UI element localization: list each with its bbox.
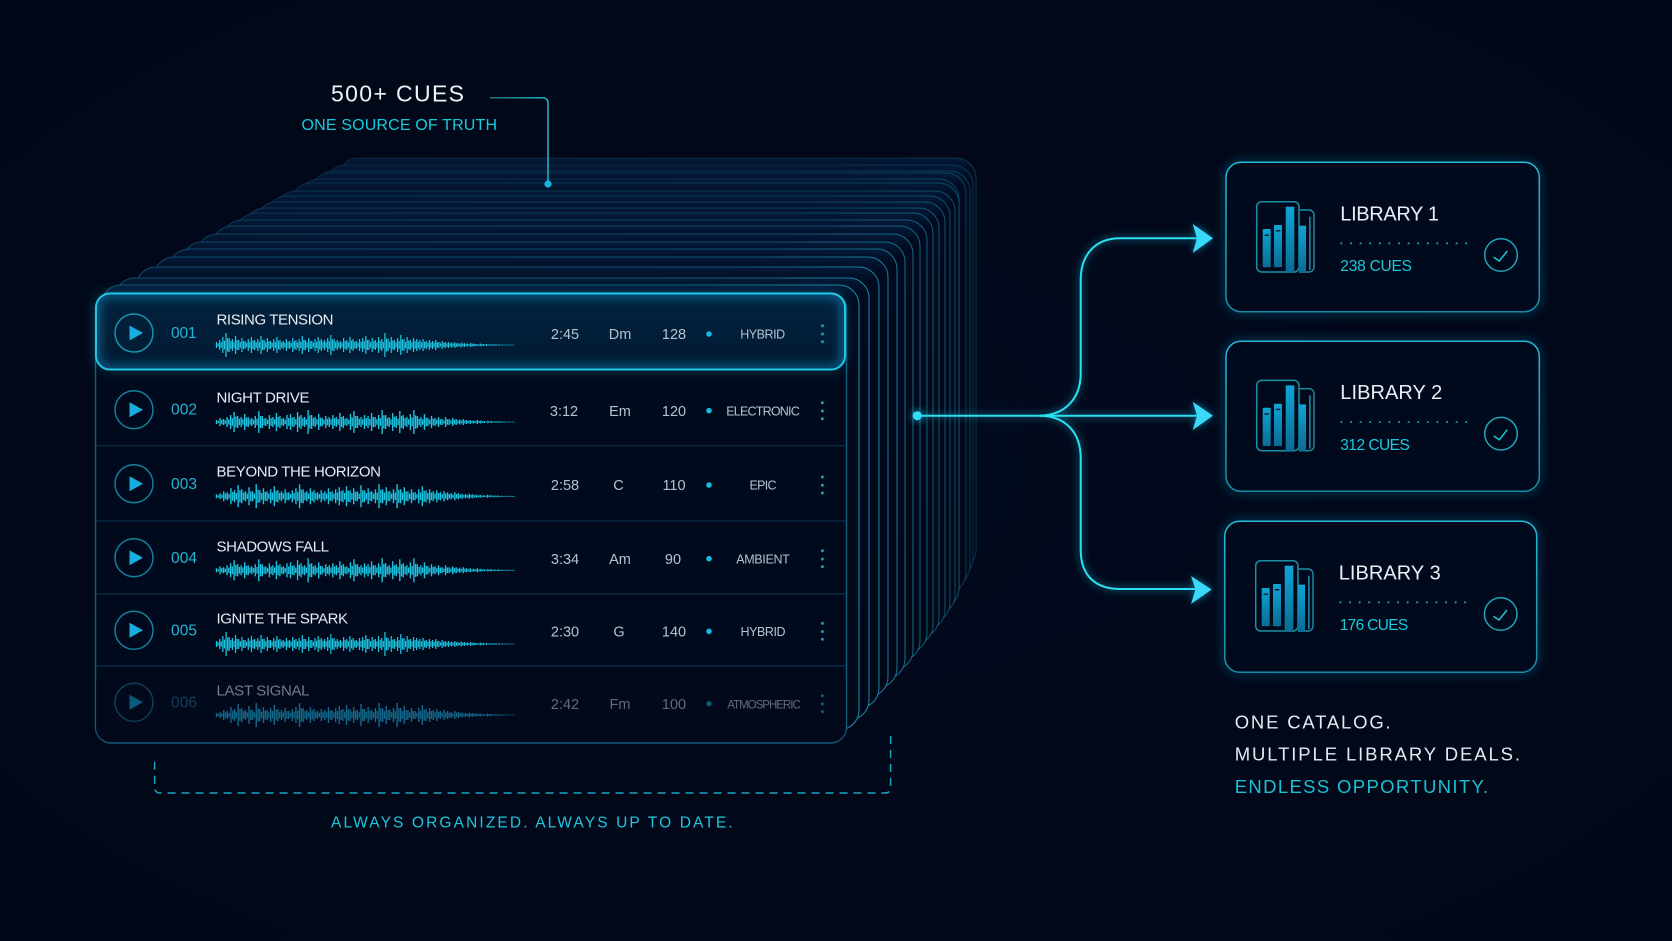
icon: library chart 2 [1257, 380, 1314, 451]
icon: library chart 1 [1257, 202, 1314, 272]
row 001 [115, 311, 822, 357]
callout: 500+ cues: ONE SOURCE OF TRUTH [302, 117, 497, 134]
row 001: RISING TENSION [216, 311, 334, 328]
row 006 (faded): ATMOSPHERIC [727, 699, 801, 711]
row 005: HYBRID [740, 625, 786, 639]
row 005: G [613, 624, 625, 640]
card: library 2 [1226, 341, 1539, 491]
row 003 [115, 464, 822, 508]
row 002: 3:12 [550, 404, 578, 420]
row 006 (faded): 100 [662, 697, 686, 713]
dashed bracket [155, 733, 891, 793]
row 001: HYBRID [740, 328, 785, 342]
row 001: 2:45 [551, 327, 579, 343]
check badge 2 [1485, 417, 1517, 450]
row 006 (faded): Fm [610, 697, 630, 713]
row 003: 110 [662, 478, 686, 494]
row 005 [115, 610, 822, 656]
row 006 (faded): 2:42 [551, 697, 579, 713]
row 003: BEYOND THE HORIZON [216, 464, 381, 481]
card: library 3: LIBRARY 3 [1339, 563, 1441, 585]
row 005: 140 [662, 624, 686, 640]
row 002: 120 [662, 404, 686, 420]
row 001: Dm [609, 327, 631, 343]
row 003: 003 [171, 476, 197, 493]
card: library 1: 238 CUES [1340, 258, 1412, 275]
icon: library chart 3 [1256, 561, 1313, 631]
row 001: 128 [662, 327, 686, 343]
card: library 1 [1226, 162, 1539, 312]
callout: 500+ cues: 500+ CUES [331, 80, 464, 106]
row 003: 2:58 [551, 478, 579, 494]
row 005: 005 [171, 622, 197, 640]
card: library 3: 176 CUES [1340, 617, 1408, 634]
row 003: C [613, 478, 624, 494]
card: library 1: LIBRARY 1 [1340, 204, 1439, 226]
check badge 1 [1485, 239, 1517, 271]
tagline: MULTIPLE LIBRARY DEALS. [1235, 744, 1520, 765]
row 005: IGNITE THE SPARK [216, 610, 348, 627]
row 004: 3:34 [551, 552, 579, 568]
row 002: NIGHT DRIVE [216, 389, 310, 406]
row 006 (faded) [115, 682, 822, 727]
card: library 2: LIBRARY 2 [1340, 382, 1442, 404]
row 001: 001 [171, 325, 196, 342]
tagline: ONE CATALOG. [1235, 712, 1391, 733]
check badge 3 [1484, 598, 1517, 630]
tagline [1235, 712, 1520, 797]
selected row highlight [95, 293, 845, 370]
card: library 2: 312 CUES [1340, 437, 1410, 454]
row 002 [115, 389, 822, 434]
row 004: Am [609, 552, 631, 568]
row 004 [115, 538, 822, 582]
branching arrows [911, 224, 1213, 604]
row 002: Em [609, 404, 631, 420]
callout: 500+ cues [302, 80, 552, 188]
row 006 (faded): 006 [171, 694, 197, 712]
row 004: AMBIENT [736, 552, 790, 566]
row 006 (faded): LAST SIGNAL [216, 682, 310, 699]
row 002: 002 [171, 402, 197, 418]
row 004: SHADOWS FALL [216, 538, 329, 555]
stacked catalog layers [101, 158, 976, 730]
row 004: 004 [171, 550, 197, 567]
row 004: 90 [665, 552, 681, 568]
card: library 3 [1225, 521, 1537, 672]
panel: cue list [95, 293, 846, 743]
tagline: ENDLESS OPPORTUNITY. [1235, 776, 1488, 797]
caption: always organized: ALWAYS ORGANIZED. ALWAYS UP TO DATE. [331, 814, 733, 832]
row 003: EPIC [750, 479, 776, 493]
row 005: 2:30 [551, 624, 579, 640]
row 002: ELECTRONIC [726, 404, 800, 418]
